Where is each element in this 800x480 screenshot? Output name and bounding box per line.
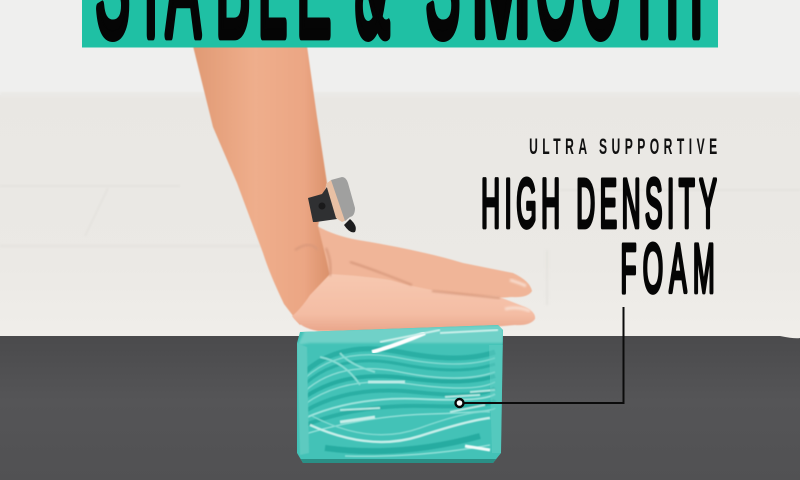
- background: wall and floor: [0, 0, 800, 340]
- title text: [95, 0, 703, 70]
- callout heading: HIGH DENSITY: [481, 166, 717, 243]
- bottom edge: [300, 459, 496, 463]
- icon: smart watch: [308, 177, 356, 232]
- yoga mat: [0, 336, 800, 480]
- foam block: [296, 325, 506, 465]
- callout text: ultra supportive: ULTRA SUPPORTIVE: [529, 134, 717, 159]
- marble swirls: [305, 349, 495, 456]
- arm and hand: [193, 46, 535, 331]
- right bevel: [489, 345, 503, 453]
- title band: [82, 0, 718, 70]
- forearm: [193, 46, 332, 325]
- leader line: [456, 307, 624, 407]
- callout heading: FOAM: [621, 231, 715, 308]
- near hand: [292, 274, 535, 331]
- far hand: [317, 226, 532, 298]
- left bevel: [297, 343, 309, 455]
- callout heading: [481, 166, 717, 308]
- top bevel: [298, 325, 503, 345]
